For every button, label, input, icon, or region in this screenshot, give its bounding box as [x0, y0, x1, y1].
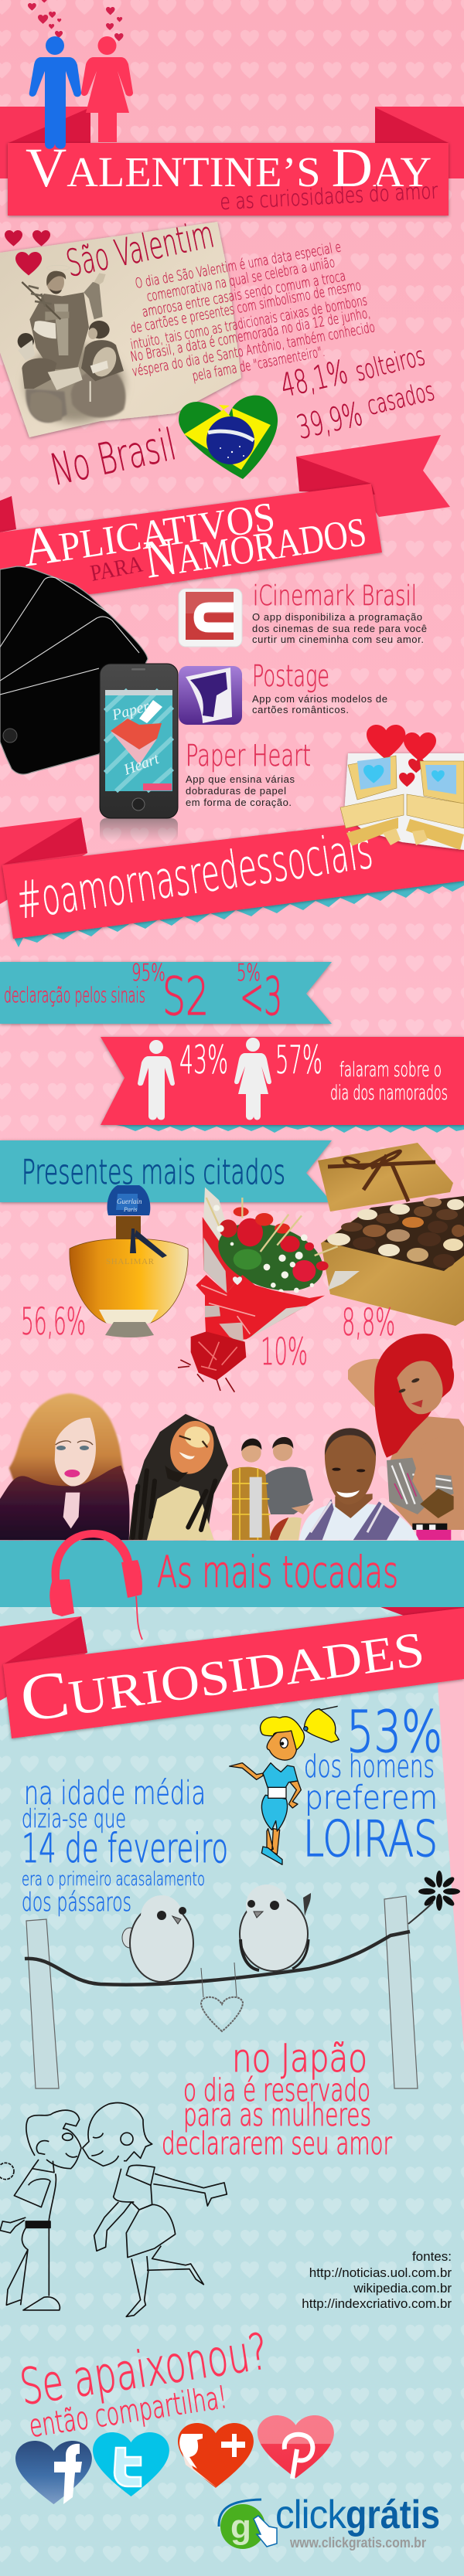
logo: clickgrátis: www.clickgratis.com.br	[289, 2535, 426, 2551]
icon: Postage	[179, 666, 242, 725]
perfume bottle: Guerlain	[117, 1198, 142, 1205]
sources: http://noticias.uol.com.br	[309, 2265, 452, 2280]
curiosidades ribbon	[0, 1607, 464, 1738]
stat: 53% prefer blondes	[303, 1699, 442, 1868]
phones fan	[0, 566, 148, 774]
heading: São Valentim: São Valentim	[63, 212, 217, 286]
text block: middle ages: 14 de fevereiro	[22, 1826, 228, 1872]
teal ribbon: gifts	[0, 1140, 332, 1202]
text block: São Valentim description	[129, 239, 377, 385]
Paper Heart text: em forma de coração.	[186, 797, 292, 808]
declaration signs text	[4, 960, 282, 1028]
gender stats text: 57%	[275, 1038, 322, 1082]
text block: São Valentim description: O dia de São Valentim é uma data especial e	[134, 239, 343, 292]
Postage text: Postage	[252, 659, 329, 693]
main iPhone with Paper Heart app	[100, 664, 178, 841]
Postage text: cartões românticos.	[252, 704, 349, 715]
gift percentages: 56,6%	[21, 1300, 86, 1344]
declaration signs text: <3	[240, 967, 282, 1028]
Paper Heart text: App que ensina várias	[186, 773, 295, 785]
main iPhone with Paper Heart app: Heart	[121, 750, 162, 779]
text block: middle ages: dizia-se que	[22, 1803, 126, 1833]
icon: hearts and computers	[340, 725, 464, 850]
icon: iCinemark	[179, 589, 242, 647]
gift percentages: 8,8%	[342, 1301, 395, 1344]
icon: Google Plus heart	[178, 2423, 254, 2488]
icon: three hearts	[5, 230, 50, 276]
call to action	[16, 2323, 271, 2445]
Paper Heart text: Paper Heart	[186, 739, 311, 773]
iCinemark text: dos cinemas de sua rede para você	[252, 623, 427, 634]
heading: Aplicativos para namorados	[19, 483, 370, 590]
text block: middle ages: era o primeiro acasalamento	[22, 1868, 205, 1890]
teal band: most played	[0, 1541, 464, 1607]
photo: singer with red hair	[348, 1334, 464, 1540]
illustration: birds on a wire	[25, 1871, 460, 2088]
sources: http://indexcriativo.com.br	[302, 2296, 452, 2311]
iCinemark text	[252, 580, 427, 645]
declaration signs text: 5%	[237, 960, 261, 987]
Postage text: App com vários modelos de	[252, 693, 387, 705]
heading: Aplicativos para namorados: APLICATIVOS	[19, 483, 278, 579]
title text: VALENTINE’S DAY	[26, 137, 432, 199]
text block: São Valentim description: comemorativa na qual se celebra a união	[145, 254, 336, 305]
icon: Facebook heart	[15, 2441, 92, 2504]
gift percentages: 10%	[261, 1330, 308, 1374]
teal ribbon: declaration signs	[0, 962, 332, 1024]
photo: duo	[232, 1437, 313, 1540]
gift percentages	[21, 1300, 395, 1374]
couple figures with hearts	[28, 0, 133, 149]
icon: woman figure	[234, 1038, 271, 1120]
icon: Pinterest heart	[258, 2415, 334, 2479]
text block: Japan	[162, 2036, 392, 2162]
sources: fontes:	[412, 2249, 452, 2264]
red ribbon with teal bunting	[101, 1037, 464, 1133]
Paper Heart text	[186, 739, 311, 808]
photo: smiling singer	[299, 1428, 419, 1540]
icon: Twitter heart	[93, 2432, 169, 2496]
stats: singles and married: 39,9%	[293, 395, 366, 447]
gender stats text	[179, 1038, 448, 1105]
panel: São Valentim torn paper and engraving	[0, 222, 241, 437]
logo: clickgrátis	[219, 2493, 440, 2551]
logo: clickgrátis: grátis	[346, 2493, 440, 2537]
perfume bottle	[70, 1185, 188, 1337]
hash ribbon	[0, 811, 464, 947]
photo: reggae singer	[129, 1414, 228, 1540]
icon: man figure	[138, 1040, 175, 1120]
declaration signs text: S2	[162, 967, 209, 1028]
rose bouquet	[178, 1188, 360, 1392]
sources: wikipedia.com.br	[353, 2281, 452, 2296]
illustration: couple line drawing	[0, 2103, 227, 2316]
text block: São Valentim description: amorosa entre casais sendo comum a troca	[141, 268, 347, 321]
text block: São Valentim description: pela fama de "casamenteiro".	[191, 344, 326, 385]
text block: Japan: no Japão	[232, 2036, 367, 2081]
heading: Aplicativos para namorados: NAMORADOS	[141, 498, 370, 590]
main iPhone with Paper Heart app: Paper	[110, 698, 152, 724]
text block: Japan: o dia é reservado	[183, 2073, 370, 2109]
text block: middle ages	[22, 1774, 228, 1917]
call to action: Se apaixonou?	[16, 2323, 271, 2417]
heading: Aplicativos para namorados: PARA	[88, 551, 145, 586]
engraving of saint	[18, 265, 125, 423]
logo: clickgrátis: click	[275, 2493, 347, 2537]
photo: singer blonde	[0, 1393, 130, 1540]
stats: singles and married: 48,1%	[277, 352, 351, 405]
teal zigzag bunting	[13, 878, 464, 947]
text block: middle ages: dos pássaros	[22, 1887, 131, 1917]
heading: Presentes mais citados: Presentes mais citados	[22, 1153, 285, 1192]
Postage text	[252, 659, 387, 715]
logo: clickgrátis: g	[230, 2508, 251, 2546]
text block: middle ages: na idade média	[24, 1774, 206, 1812]
background: blue curiosities panel	[0, 1607, 464, 2576]
stats: singles and married	[277, 341, 438, 447]
declaration signs text: 95%	[131, 960, 165, 987]
call to action: então compartilha!	[27, 2380, 230, 2445]
icon: headphones	[49, 1530, 142, 1640]
illustration: blonde cartoon girl	[230, 1706, 339, 1864]
aplicativos ribbon	[0, 435, 450, 604]
stats: singles and married: solteiros	[353, 341, 428, 388]
stat: 53% prefer blondes: preferem	[305, 1779, 438, 1816]
chocolate box	[318, 1143, 464, 1326]
icon: Brazil flag heart	[179, 396, 278, 479]
iCinemark text: curtir um cineminha com seu amor.	[252, 634, 424, 645]
iCinemark text: O app disponibiliza a programação	[252, 611, 422, 623]
perfume bottle: Paris	[123, 1206, 137, 1213]
declaration signs text: declaração pelos sinais	[4, 984, 145, 1008]
label: No Brasil: No Brasil	[46, 420, 180, 496]
perfume bottle: SHALIMAR	[106, 1257, 155, 1266]
Paper Heart text: dobraduras de papel	[186, 785, 286, 797]
text block: Japan: para as mulheres	[183, 2098, 371, 2133]
title ribbon	[0, 107, 464, 216]
heading: Curiosidades: CURIOSIDADES	[15, 1606, 428, 1736]
sources	[302, 2249, 452, 2311]
gender stats text: 43%	[179, 1038, 228, 1082]
